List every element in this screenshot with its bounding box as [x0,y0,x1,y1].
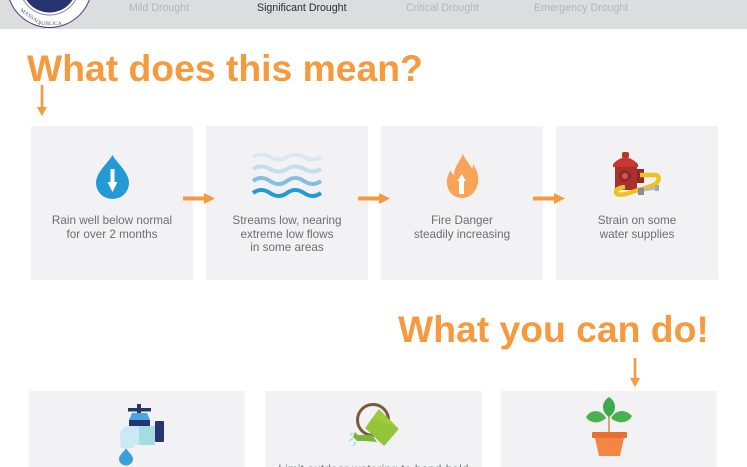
panel: faucet action [29,391,245,467]
arrow: step 1 to 2 [183,193,215,204]
state seal logo: PUBLICA [38,21,62,27]
header bar [0,0,747,29]
icon: flame [446,154,478,198]
panel: watering can action [265,391,482,467]
icon: potted plant [586,397,632,456]
text: water supplies [598,214,676,241]
panel: water supplies [556,126,718,280]
text: streams: extreme low flows [241,228,333,241]
arrow: down to first step [37,85,47,116]
text: rain: Rain well below normal [52,214,172,227]
text: fire [414,214,510,241]
heading: What does this mean?: What does this mean? [27,47,423,89]
nav: Mild Drought: Mild Drought [129,2,189,14]
heading: What you can do!: What you can do! [398,308,709,350]
icon: faucet [119,404,164,466]
arrow: step 3 to 4 [533,193,565,204]
icon: watering can [349,403,398,446]
panel: rain [31,126,193,280]
panel: streams [206,126,368,280]
text: water supplies: water supplies [600,228,674,241]
panel: plant action [501,391,717,467]
arrow: down to actions [630,358,640,387]
icon: water drop [96,155,129,199]
arrow: step 2 to 3 [358,193,390,204]
nav: Significant Drought: Significant Drought [257,2,347,14]
state seal logo [9,0,90,28]
nav: Critical Drought: Critical Drought [406,2,479,14]
panel: fire [381,126,543,280]
text: fire: steadily increasing [414,228,510,241]
nav: Emergency Drought: Emergency Drought [534,2,628,14]
text: fire: Fire Danger [431,214,493,227]
text: rain [52,214,172,241]
state seal logo: MASSAC [19,8,41,26]
text: rain: for over 2 months [67,228,157,241]
text: streams: in some areas [250,241,324,254]
text: streams: Streams low, nearing [232,214,342,227]
text: streams [232,214,342,254]
icon: waves [252,153,322,198]
icon: hydrant and hose [613,152,661,197]
text: water supplies: Strain on some [598,214,676,227]
